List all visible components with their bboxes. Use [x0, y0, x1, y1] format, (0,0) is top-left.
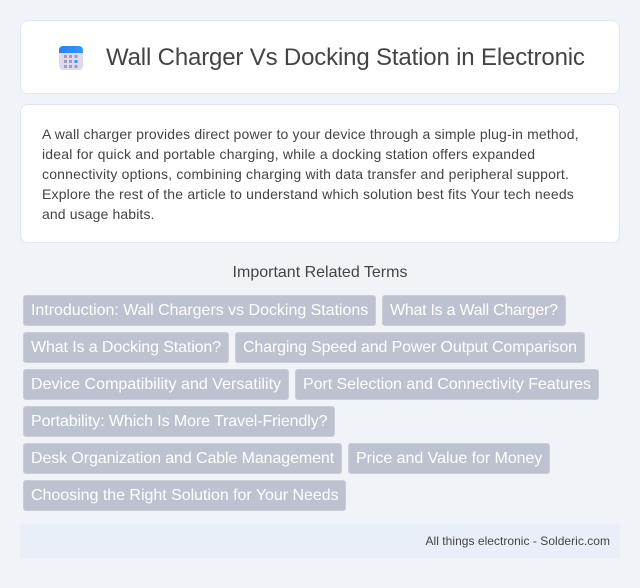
tag [382, 295, 566, 326]
tag list [23, 295, 599, 511]
tag: Choosing the Right Solution for Your Needs [31, 487, 339, 504]
footer [20, 524, 620, 558]
tag [23, 480, 346, 511]
tag: Desk Organization and Cable Management [31, 450, 334, 467]
tag [235, 332, 585, 363]
tag [23, 369, 289, 400]
intro text: ideal for quick and portable charging, while a docking station offers expanded [42, 146, 535, 162]
tag: Introduction: Wall Chargers vs Docking Stations [31, 302, 368, 319]
intro text: Explore the rest of the article to understand which solution best fits Your tech needs [42, 186, 574, 202]
tag: Port Selection and Connectivity Features [303, 376, 591, 393]
intro text: and usage habits. [42, 206, 155, 222]
intro text [42, 126, 579, 222]
tag [23, 406, 335, 437]
tag: What Is a Wall Charger? [390, 302, 558, 319]
header panel [20, 20, 620, 94]
tag [348, 443, 550, 474]
intro panel [20, 104, 620, 243]
intro text: A wall charger provides direct power to your device through a simple plug-in method, [42, 126, 579, 142]
footer text: All things electronic - Solderic.com [426, 534, 610, 548]
title: Wall Charger Vs Docking Station in Electronic [106, 44, 585, 71]
tag: Price and Value for Money [356, 450, 542, 467]
tag: What Is a Docking Station? [31, 339, 221, 356]
tag [23, 443, 342, 474]
intro text: connectivity options, combining charging with data transfer and peripheral support. [42, 166, 569, 182]
tag: Charging Speed and Power Output Comparison [243, 339, 577, 356]
section heading: Important Related Terms [233, 264, 407, 281]
tag: Portability: Which Is More Travel-Friendly? [31, 413, 327, 430]
tag: Device Compatibility and Versatility [31, 376, 281, 393]
tag [23, 332, 229, 363]
tag [23, 295, 376, 326]
tag [295, 369, 599, 400]
icon: calendar [59, 46, 83, 70]
